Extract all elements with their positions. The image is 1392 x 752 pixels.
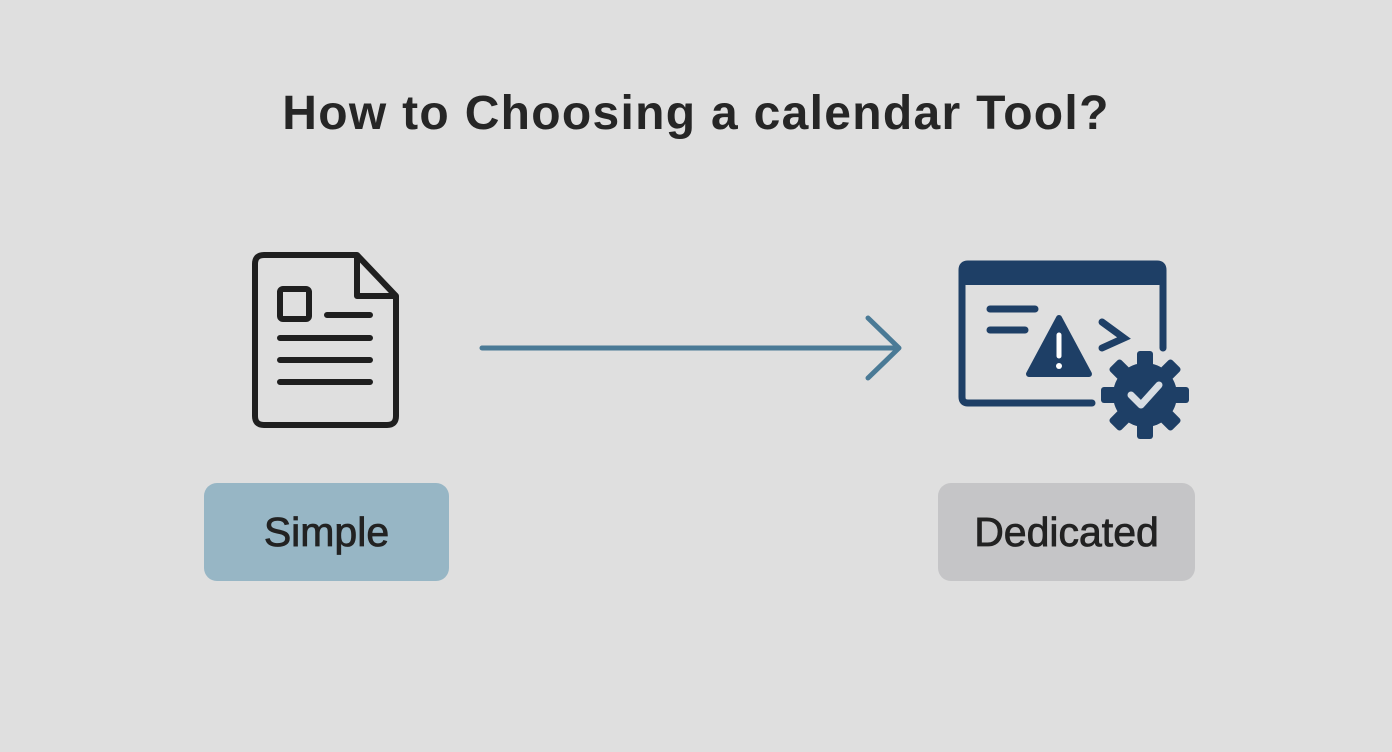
label: Simple: Simple xyxy=(264,508,389,554)
label: Dedicated xyxy=(938,483,1195,581)
arrow xyxy=(482,318,899,378)
title: How to Choosing a calendar Tool? xyxy=(282,87,1110,140)
label: Dedicated: Dedicated xyxy=(974,508,1159,554)
label: Simple xyxy=(204,483,449,581)
icon: dedicated tool xyxy=(962,264,1189,439)
icon: document xyxy=(255,255,396,425)
